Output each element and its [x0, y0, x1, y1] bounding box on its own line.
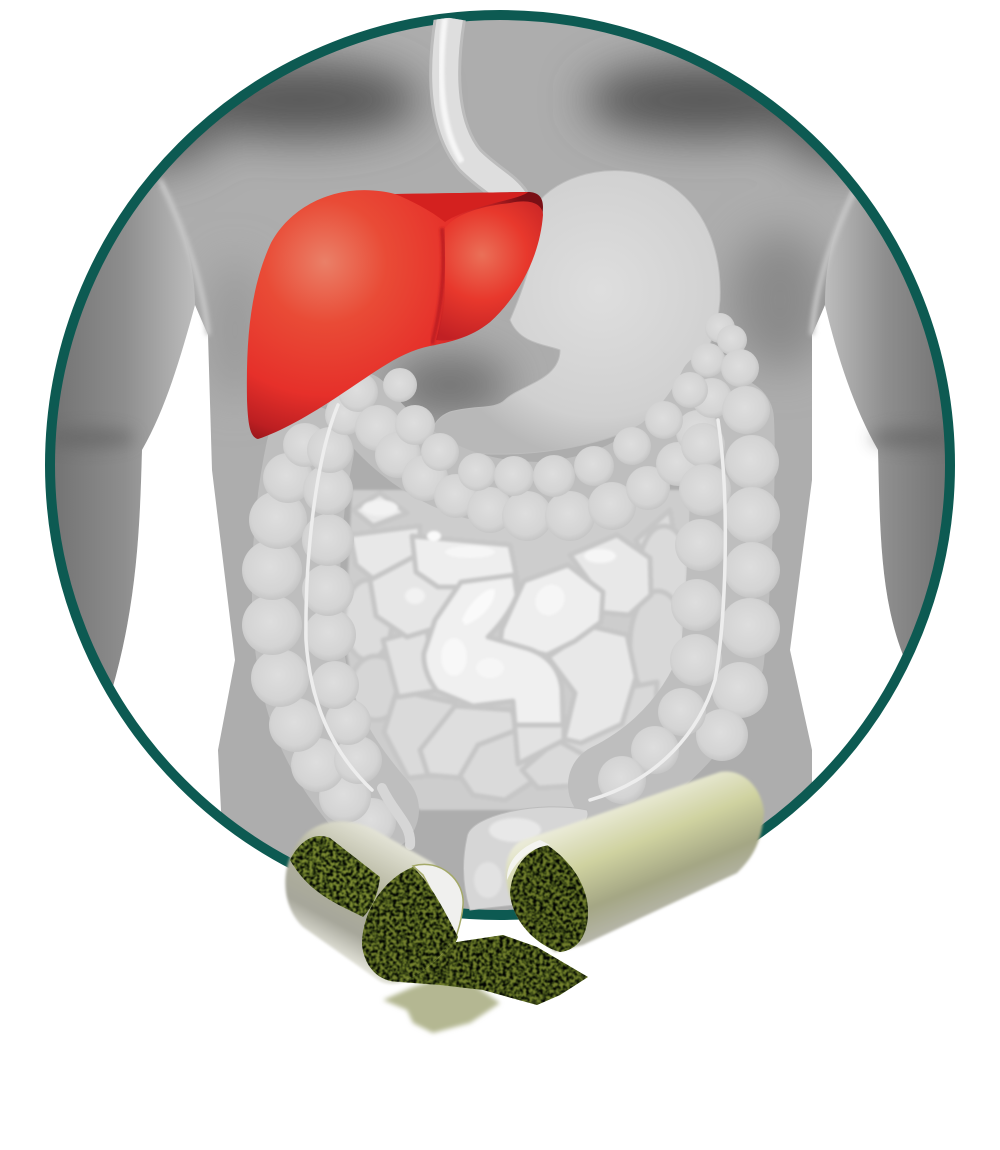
right arm [825, 205, 945, 654]
powder pile [383, 935, 588, 1033]
small intestine [344, 490, 695, 810]
liver [247, 190, 543, 439]
rectum [464, 807, 588, 910]
large intestine [242, 313, 780, 846]
stomach [433, 171, 720, 454]
left arm [55, 194, 195, 685]
left capsule [285, 821, 463, 984]
body silhouette [40, 10, 960, 920]
esophagus [441, 18, 515, 200]
right capsule [506, 772, 764, 952]
colon bands [306, 405, 725, 845]
ring [50, 15, 950, 915]
white gaps [113, 305, 235, 812]
